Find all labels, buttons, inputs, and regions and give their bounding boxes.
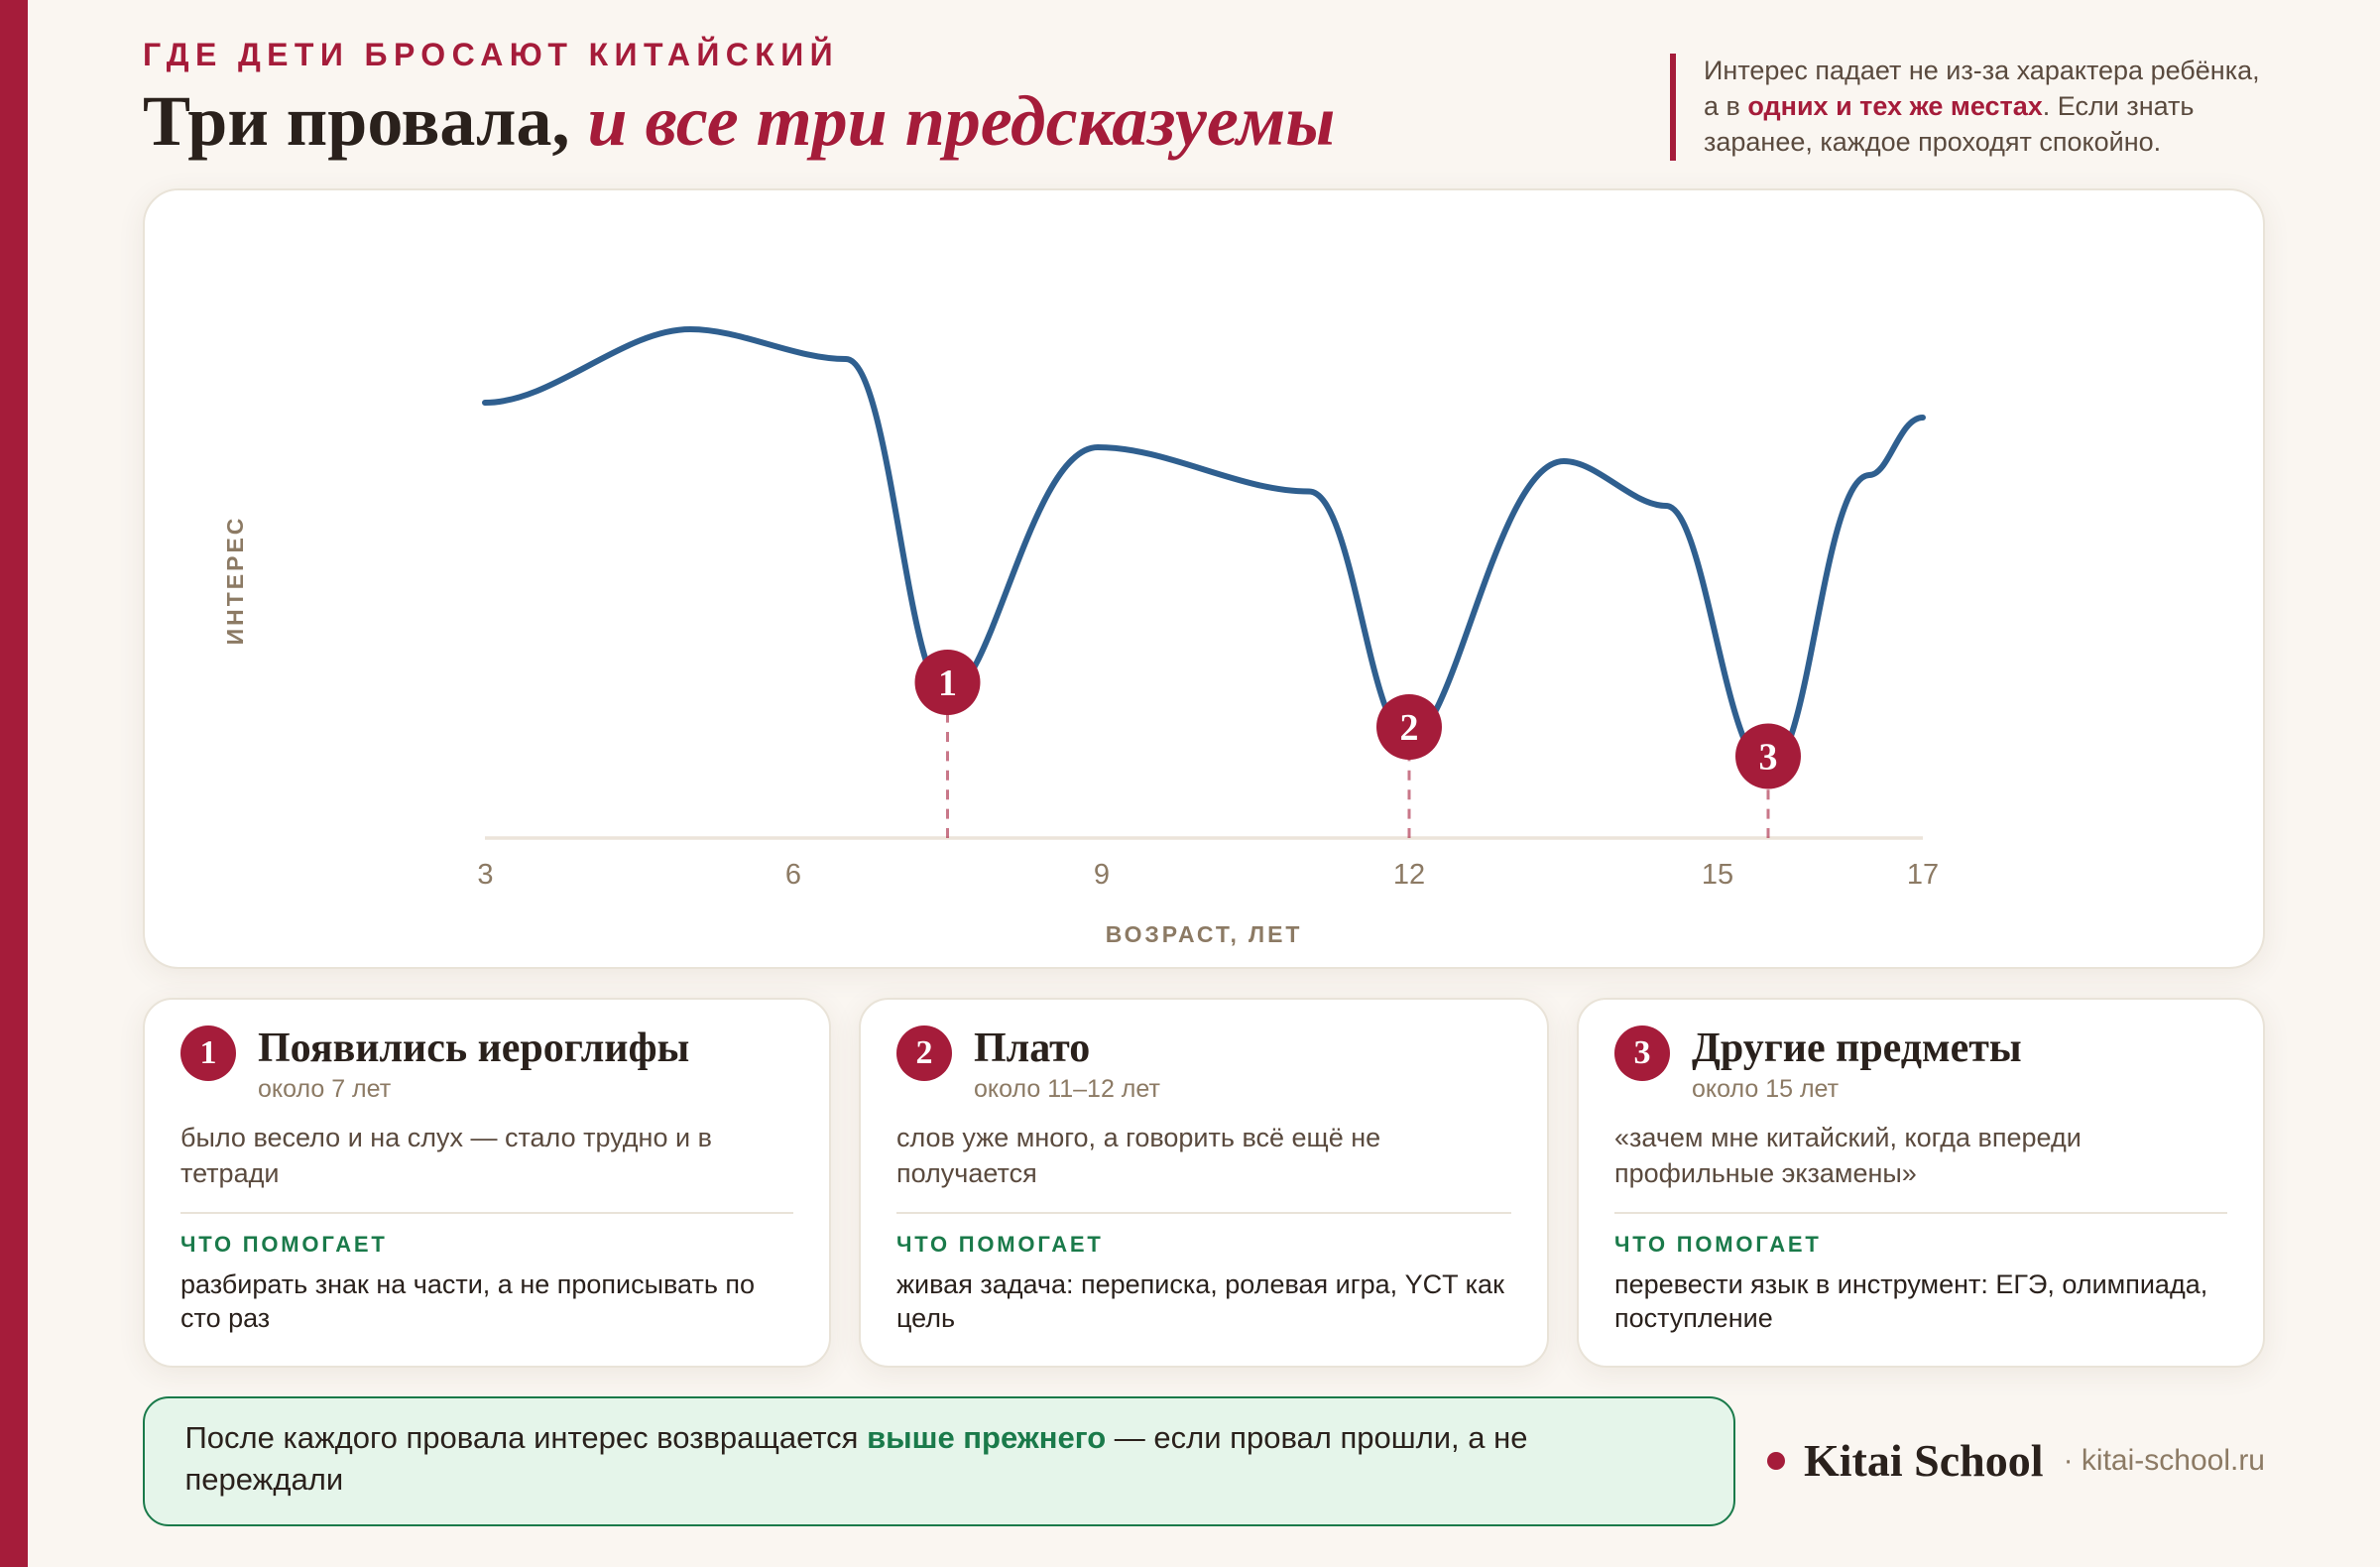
- description 2: получается: [896, 1158, 1037, 1188]
- marker 2: 2: [1400, 707, 1418, 749]
- help text 1: сто раз: [180, 1303, 270, 1333]
- left accent bar: [0, 0, 28, 1567]
- x axis ticks: 17: [1907, 859, 1939, 891]
- badge 3: [1614, 1025, 1670, 1081]
- badge 1: 1: [200, 1034, 216, 1071]
- brand dot: [1767, 1452, 1785, 1470]
- help label 3: ЧТО ПОМОГАЕТ: [1614, 1232, 1822, 1256]
- help text 2: [896, 1269, 1504, 1333]
- marker 3: [1735, 724, 1801, 789]
- help text 3: поступление: [1614, 1303, 1773, 1333]
- x axis ticks: 15: [1702, 859, 1733, 891]
- help label 1: ЧТО ПОМОГАЕТ: [180, 1232, 388, 1256]
- help text 1: разбирать знак на части, а не прописывать по: [180, 1269, 755, 1299]
- note text: Интерес падает не из-за характера ребёнка,: [1704, 56, 2260, 85]
- description 1: тетради: [180, 1158, 279, 1188]
- help text 2: цель: [896, 1303, 955, 1333]
- title: Три провала, и все три предсказуемы: [143, 81, 1335, 161]
- panel: failure 1: [143, 998, 831, 1368]
- age 3: около 15 лет: [1692, 1075, 1839, 1103]
- heading 3: Другие предметы: [1692, 1025, 2022, 1071]
- callout text: [184, 1420, 1527, 1497]
- x axis ticks: 6: [785, 859, 801, 891]
- panel: failure 2: [859, 998, 1549, 1368]
- interest line: [485, 329, 1923, 769]
- description 2: слов уже много, а говорить всё ещё не: [896, 1123, 1380, 1152]
- description 3: [1614, 1123, 2082, 1188]
- brand name: Kitai School: [1804, 1435, 2044, 1486]
- marker 2: [1376, 694, 1442, 760]
- panel: failure 3: [1577, 998, 2265, 1368]
- help text 1: [180, 1269, 755, 1333]
- description 1: было весело и на слух — стало трудно и в: [180, 1123, 712, 1152]
- marker 1: 1: [938, 663, 957, 704]
- note text: а в одних и тех же местах. Если знать: [1704, 91, 2194, 121]
- age 1: около 7 лет: [258, 1075, 391, 1103]
- callout text: переждали: [184, 1462, 343, 1497]
- description 3: «зачем мне китайский, когда впереди: [1614, 1123, 2082, 1152]
- help text 2: живая задача: переписка, ролевая игра, YCT как: [896, 1269, 1504, 1299]
- dropline 1: [946, 682, 949, 838]
- marker 1: [914, 650, 980, 715]
- heading 1: Появились иероглифы: [258, 1025, 689, 1071]
- help text 3: [1614, 1269, 2207, 1333]
- badge 3: 3: [1634, 1034, 1650, 1071]
- x axis title: ВОЗРАСТ, ЛЕТ: [1106, 921, 1302, 947]
- y axis title: ИНТЕРЕС: [222, 516, 248, 645]
- x axis ticks: 3: [477, 859, 494, 891]
- x axis line: [485, 836, 1923, 840]
- dropline 3: [1767, 756, 1769, 838]
- heading 2: Плато: [974, 1025, 1090, 1071]
- note text: заранее, каждое проходят спокойно.: [1704, 127, 2161, 157]
- callout text: После каждого провала интерес возвращается выше прежнего — если провал прошли, а не: [184, 1420, 1527, 1455]
- x axis ticks: 9: [1094, 859, 1110, 891]
- brand url: · kitai-school.ru: [2064, 1444, 2265, 1477]
- dropline 2: [1408, 727, 1410, 838]
- help label 2: ЧТО ПОМОГАЕТ: [896, 1232, 1104, 1256]
- description 1: [180, 1123, 712, 1188]
- marker 3: 3: [1759, 736, 1777, 778]
- note accent rule: [1670, 54, 1676, 161]
- badge 1: [180, 1025, 236, 1081]
- eyebrow: ГДЕ ДЕТИ БРОСАЮТ КИТАЙСКИЙ: [143, 37, 839, 72]
- panel: chart: [143, 188, 2265, 969]
- x axis ticks: [477, 859, 1939, 891]
- note text: [1704, 56, 2260, 157]
- help text 3: перевести язык в инструмент: ЕГЭ, олимпиада,: [1614, 1269, 2207, 1299]
- description 2: [896, 1123, 1380, 1188]
- badge 2: [896, 1025, 952, 1081]
- brand: [1767, 1435, 2265, 1486]
- age 2: около 11–12 лет: [974, 1075, 1160, 1103]
- intro note: [1670, 54, 2260, 161]
- x axis ticks: 12: [1393, 859, 1425, 891]
- badge 2: 2: [916, 1034, 932, 1071]
- description 3: профильные экзамены»: [1614, 1158, 1917, 1188]
- callout: [143, 1396, 1735, 1526]
